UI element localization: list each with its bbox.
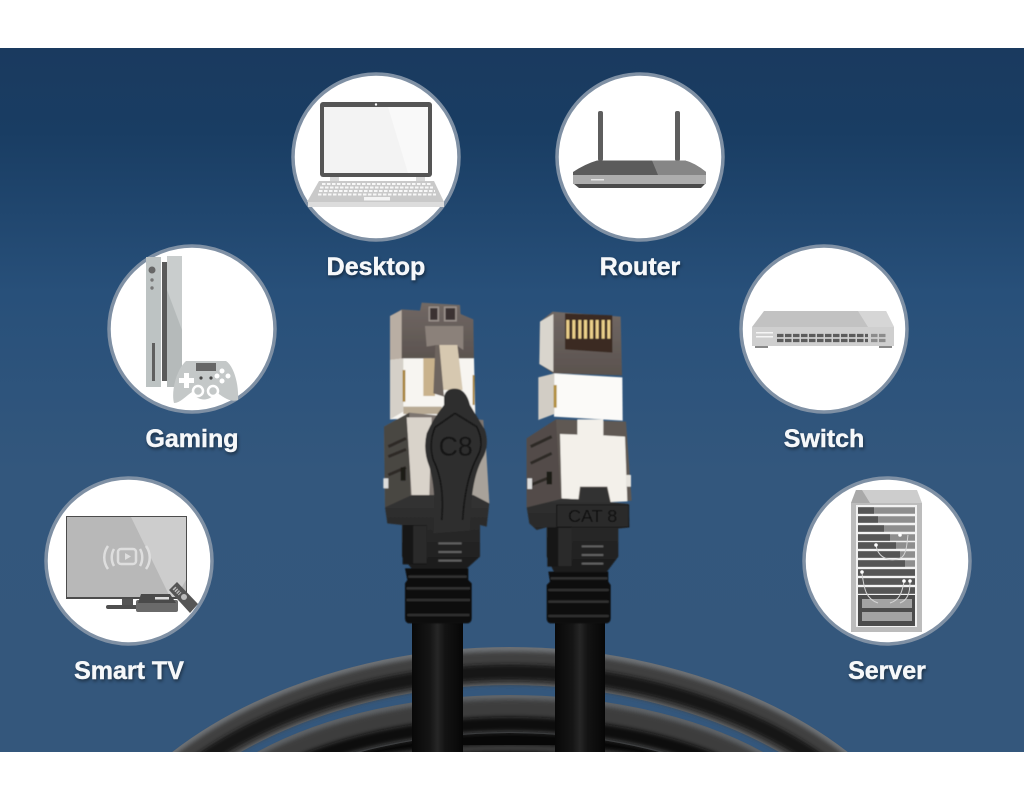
laptop <box>307 102 444 207</box>
shield <box>390 358 475 419</box>
housing <box>527 419 632 507</box>
server rack <box>851 490 922 632</box>
device: switch <box>741 246 907 412</box>
label: Desktop: Desktop <box>327 253 425 281</box>
game controller <box>173 361 238 403</box>
left cable <box>412 620 463 752</box>
strain relief <box>547 572 611 623</box>
coiled cable <box>180 666 840 785</box>
lower boot <box>527 487 629 572</box>
lower boot <box>385 495 489 569</box>
latch tab with C8 <box>425 389 487 533</box>
television <box>66 516 187 609</box>
housing <box>384 413 489 507</box>
right connector <box>527 312 632 623</box>
device: server <box>804 478 970 644</box>
label: Server: Server <box>848 657 926 685</box>
latch tab with C8: C8 <box>439 432 473 462</box>
device: gaming <box>109 246 275 412</box>
console <box>146 256 182 387</box>
label: Switch: Switch <box>784 425 864 453</box>
strain relief <box>405 568 472 623</box>
CAT 8 marking: CAT 8 <box>568 506 617 526</box>
left connector <box>383 303 489 623</box>
label: Gaming: Gaming <box>145 425 239 453</box>
device: router <box>557 74 723 240</box>
head <box>390 303 474 362</box>
label: Smart TV: Smart TV <box>74 657 184 685</box>
label: Router: Router <box>600 253 681 281</box>
streaming box and remote <box>136 582 198 613</box>
device: desktop <box>293 74 459 240</box>
router icon <box>573 111 706 188</box>
shield <box>554 373 623 421</box>
head <box>539 312 622 375</box>
right cable <box>555 620 605 752</box>
device: smart tv <box>46 478 212 644</box>
CAT 8 marking <box>557 505 629 527</box>
switch icon <box>752 311 894 348</box>
